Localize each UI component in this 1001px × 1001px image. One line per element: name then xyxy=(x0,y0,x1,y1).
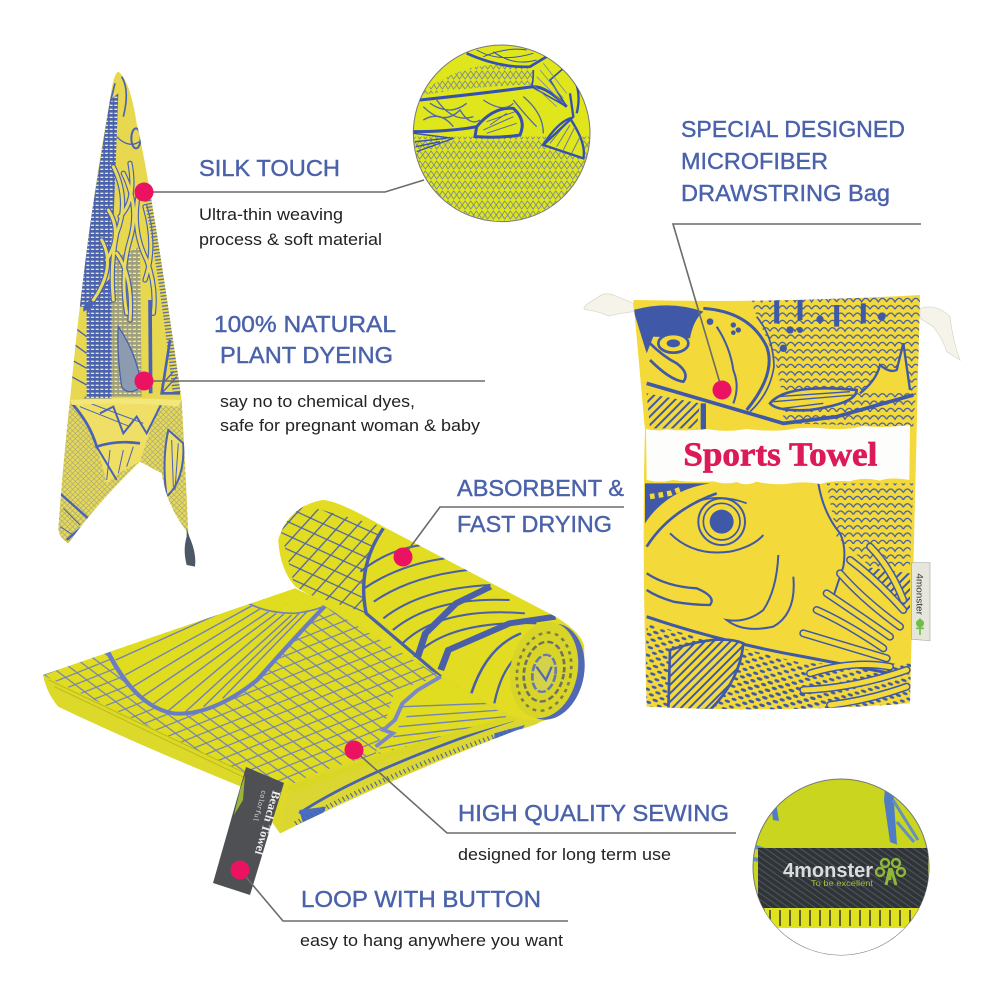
flat towel top xyxy=(43,588,513,787)
bag drawstring right knot xyxy=(920,307,960,360)
lower towel layer xyxy=(265,717,540,833)
drawstring bag heading: SPECIAL DESIGNED xyxy=(681,116,905,142)
sewn yellow hem xyxy=(765,908,935,928)
natural dyeing description: safe for pregnant woman & baby xyxy=(220,417,481,435)
folded and rolled towel xyxy=(35,497,592,833)
detail circle: brand label close-up xyxy=(750,779,940,958)
detail circle: silk touch fabric xyxy=(410,45,597,227)
bag body xyxy=(633,295,920,709)
hanging towel xyxy=(50,72,203,567)
silk touch description: Ultra-thin weaving xyxy=(199,206,343,224)
natural dyeing description: say no to chemical dyes, xyxy=(220,393,415,411)
towel base layer xyxy=(43,588,556,833)
tag tagline text: colorful xyxy=(250,789,267,822)
bag title text: Sports Towel xyxy=(683,436,877,473)
drawstring bag heading: MICROFIBER xyxy=(681,148,828,174)
loop description: easy to hang anywhere you want xyxy=(300,932,563,950)
bag side tag: 4monster xyxy=(915,573,925,615)
front hem of towel xyxy=(43,675,288,833)
label brand name: 4monster xyxy=(783,860,873,882)
absorbent heading: ABSORBENT & xyxy=(457,475,624,501)
natural dyeing heading: 100% NATURAL xyxy=(214,311,396,337)
silk touch heading: SILK TOUCH xyxy=(199,155,340,181)
callout: absorbent and fast drying xyxy=(394,475,624,566)
callout: loop with button xyxy=(230,860,568,950)
drawstring bag heading: DRAWSTRING Bag xyxy=(681,180,890,206)
callout: high quality sewing xyxy=(344,740,736,864)
absorbent heading: FAST DRYING xyxy=(457,511,612,537)
callout: natural plant dyeing xyxy=(134,311,485,435)
icon: brand clover logo xyxy=(876,859,905,885)
callout: silk touch xyxy=(134,155,424,249)
tag brand text: Beach Towel xyxy=(252,789,284,857)
roll spiral end xyxy=(503,618,592,724)
silk touch description: process & soft material xyxy=(199,231,382,249)
sewing description: designed for long term use xyxy=(458,846,671,864)
bag side tag xyxy=(912,563,930,641)
bag drawstring left knot xyxy=(584,294,633,316)
loop heading: LOOP WITH BUTTON xyxy=(301,886,541,912)
roll of towel xyxy=(278,500,584,720)
woven brand label xyxy=(758,848,928,908)
natural dyeing heading: PLANT DYEING xyxy=(220,342,393,368)
callout: drawstring bag xyxy=(673,116,921,400)
label tagline: To be excellent xyxy=(811,879,874,888)
sports towel drawstring bag xyxy=(584,293,960,710)
bag white label band xyxy=(646,425,910,484)
hang loop tag xyxy=(213,767,284,895)
sewing heading: HIGH QUALITY SEWING xyxy=(458,800,729,826)
